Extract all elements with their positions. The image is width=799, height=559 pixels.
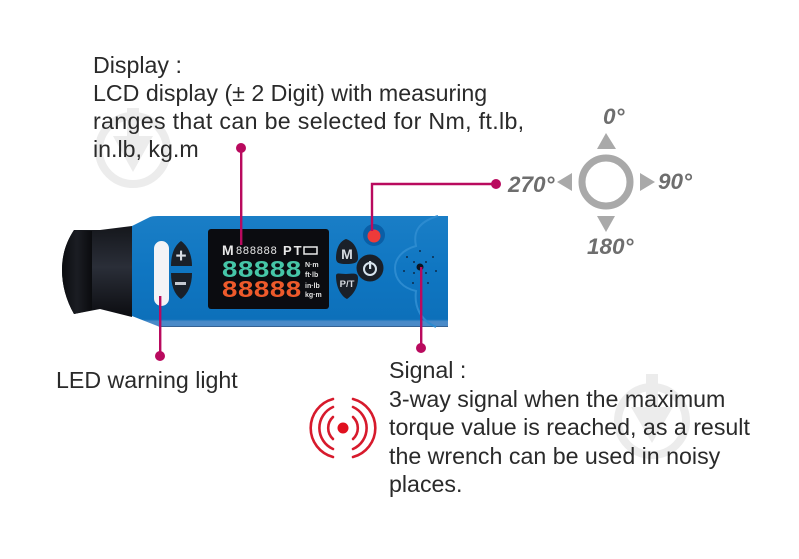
watermark: bottom right: [618, 374, 686, 455]
text: signal: torque value is reached, as a result: [389, 414, 750, 440]
plus button: +: [175, 246, 187, 267]
plus button: [171, 241, 192, 267]
display unit labels: ft·lb: [305, 272, 318, 279]
arrow right: [640, 173, 655, 191]
angle labels: 180°: [587, 234, 635, 259]
text: signal: the wrench can be used in noisy: [389, 443, 721, 469]
angle labels: 90°: [658, 169, 693, 194]
icon: red signal waves: [311, 399, 375, 457]
label: LED warning light: LED warning light: [56, 367, 238, 393]
display top row: 888888: [236, 245, 278, 257]
text: signal: places.: [389, 471, 462, 497]
display green row: 88888: [222, 257, 302, 282]
arrow left: [557, 173, 572, 191]
display top row: PT: [283, 243, 304, 258]
speaker panel: [395, 216, 438, 327]
heading and text: display: Display :: [93, 52, 182, 78]
leader: signal: [416, 267, 426, 353]
heading and text: display: ranges that can be selected for Nm, ft.lb,: [93, 108, 524, 134]
LCD display: [208, 229, 329, 309]
M button: M: [341, 246, 353, 262]
LED warning light strip: [154, 241, 169, 306]
minus button: [171, 273, 192, 299]
watermark: top left: [99, 108, 167, 184]
display unit labels: kg·m: [305, 292, 322, 299]
display top row: M: [222, 242, 234, 258]
arrow down: [597, 216, 615, 232]
leader: LED warning light: [155, 296, 165, 361]
heading and text: display: LCD display (± 2 Digit) with measuring: [93, 80, 487, 106]
angle labels: 270°: [507, 172, 556, 197]
P/T button: [336, 274, 358, 299]
power button: [356, 254, 384, 282]
wrench body: [132, 216, 448, 327]
arrow up: [597, 133, 616, 149]
text: signal: 3-way signal when the maximum: [389, 386, 725, 412]
P/T button: P/T: [340, 279, 355, 290]
direction gauge: [507, 104, 693, 259]
display unit labels: [305, 262, 322, 299]
M button: [336, 239, 358, 264]
heading and text: display: in.lb, kg.m: [93, 136, 199, 162]
display orange row: 88888: [222, 277, 302, 302]
angle labels: 0°: [603, 104, 626, 129]
red signal lamp: [363, 224, 385, 246]
leader: signal lamp: [372, 179, 501, 231]
text: signal: Signal :: [389, 357, 466, 383]
display unit labels: N·m: [305, 262, 319, 269]
display unit labels: in·lb: [305, 283, 320, 290]
wrench grip: [62, 226, 132, 317]
angle labels: [507, 104, 693, 259]
gauge ring: [582, 158, 630, 206]
leader: display: [236, 143, 246, 245]
display top row: [222, 242, 317, 258]
wrench illustration: [62, 216, 448, 327]
